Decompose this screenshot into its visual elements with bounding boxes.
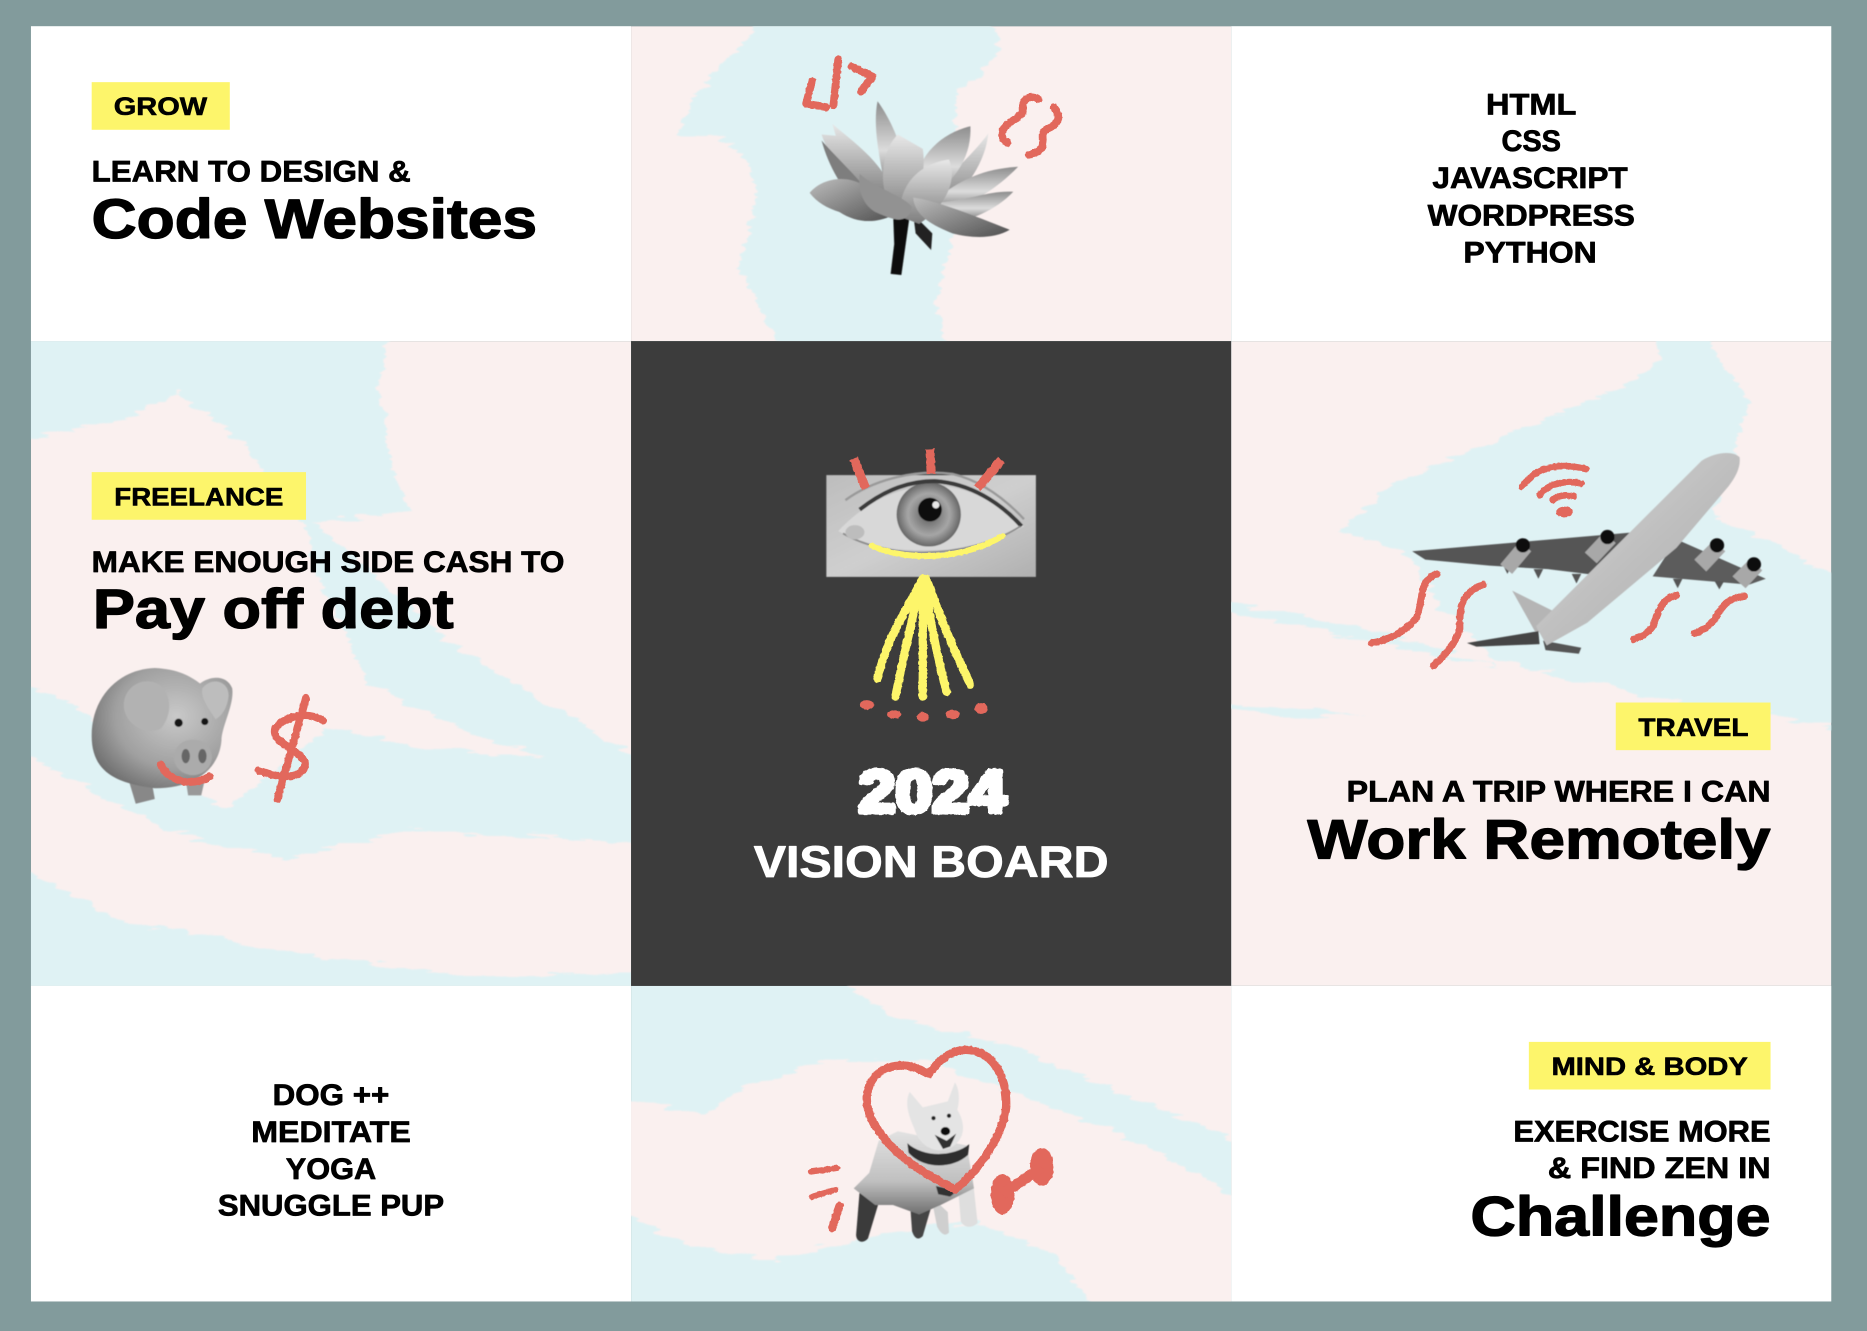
doodle: code brackets <box>806 60 873 107</box>
panel: dog <box>631 986 1232 1302</box>
panel: center title <box>631 341 1231 986</box>
brush: pink strokes <box>631 986 1232 1302</box>
text: habits list <box>218 1080 444 1223</box>
doodle: curly braces <box>1002 97 1058 155</box>
doodle: smile <box>161 764 210 782</box>
title: year: 2024 <box>858 758 1006 825</box>
text: tech list: HTML <box>1486 89 1576 121</box>
text: habits list: DOG ++ <box>273 1080 389 1112</box>
brush: blue stroke <box>679 12 1000 352</box>
text: tech list <box>1428 89 1635 270</box>
doodle: dumbbell <box>991 1148 1054 1215</box>
heading: challenge: Challenge <box>1471 1184 1771 1247</box>
illustration: eye <box>826 473 1036 577</box>
subheading: learn to design: LEARN TO DESIGN & <box>92 157 411 189</box>
subheading: find zen: & FIND ZEN IN <box>1548 1153 1771 1185</box>
brush: blue strokes <box>31 341 631 986</box>
panel: lotus <box>631 12 1231 352</box>
tag: travel <box>1616 703 1771 750</box>
tag: grow <box>92 82 230 130</box>
doodle: motion marks <box>811 1168 839 1228</box>
doodle: red rays <box>854 449 1001 488</box>
text: tech list: PYTHON <box>1463 238 1597 270</box>
brush: blue strokes <box>1220 333 1840 729</box>
text: habits list: SNUGGLE PUP <box>218 1191 444 1223</box>
tag: travel: TRAVEL <box>1638 714 1749 742</box>
text: habits list: MEDITATE <box>251 1117 411 1149</box>
tag: mind and body: MIND & BODY <box>1551 1053 1748 1081</box>
heading: pay off debt: Pay off debt <box>93 577 454 640</box>
tag: grow: GROW <box>114 93 208 121</box>
doodle: yellow underline <box>872 536 1003 556</box>
doodle: heart <box>867 1050 1006 1190</box>
panel: travel <box>1220 333 1840 986</box>
illustration: dog <box>854 1082 978 1242</box>
heading: work remotely: Work Remotely <box>1307 807 1771 870</box>
illustration: airplane <box>1412 453 1766 654</box>
doodle: red dots <box>860 700 988 722</box>
panel: tech list <box>1231 26 1831 341</box>
title: vision board: VISION BOARD <box>754 838 1109 887</box>
illustration: piggy bank <box>92 668 232 804</box>
text: habits list: YOGA <box>286 1154 376 1186</box>
text: tech list: WORDPRESS <box>1428 201 1635 233</box>
heading: code websites: Code Websites <box>92 187 537 250</box>
panel: grow <box>31 26 631 341</box>
illustration: lotus flower <box>810 101 1018 275</box>
panel: mind and body <box>1231 986 1831 1301</box>
text: tech list: JAVASCRIPT <box>1432 163 1628 195</box>
doodle: dollar sign <box>258 698 323 799</box>
subheading: exercise more: EXERCISE MORE <box>1513 1116 1771 1148</box>
panel: dog list <box>31 986 631 1301</box>
panel: freelance <box>31 341 631 986</box>
tag: mind and body <box>1529 1042 1771 1090</box>
doodle: wifi <box>1522 466 1586 517</box>
subheading: side cash: MAKE ENOUGH SIDE CASH TO <box>92 547 564 579</box>
tag: freelance: FREELANCE <box>114 483 283 511</box>
tag: freelance <box>92 472 306 520</box>
doodle: exhaust waves <box>1372 574 1744 666</box>
doodle: yellow beams <box>878 579 970 697</box>
subheading: plan a trip: PLAN A TRIP WHERE I CAN <box>1347 777 1771 809</box>
text: tech list: CSS <box>1501 126 1561 158</box>
